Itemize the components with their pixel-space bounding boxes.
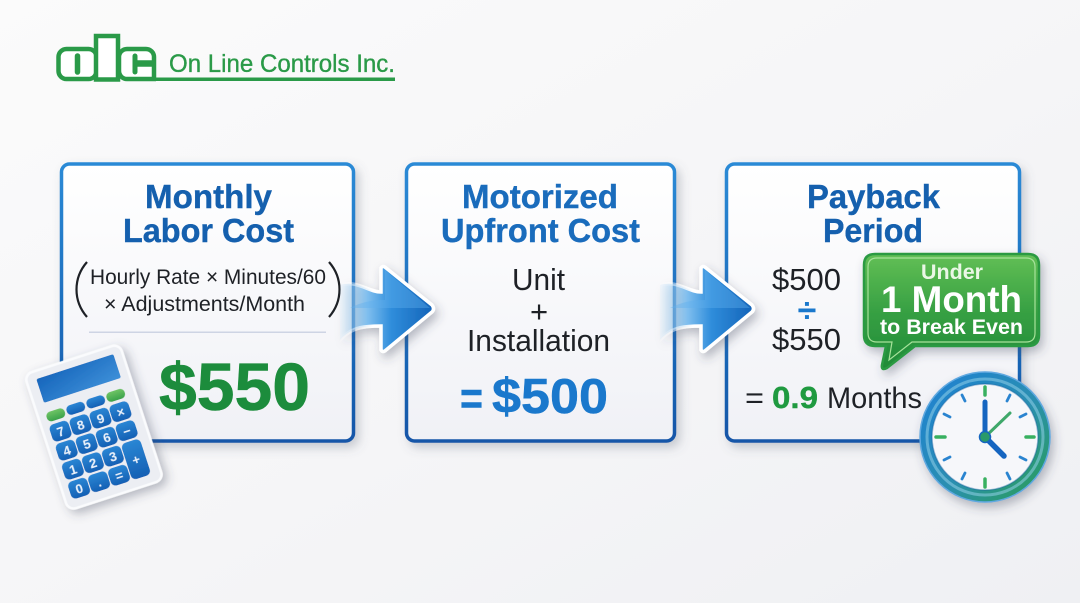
clock ticks <box>936 387 1034 487</box>
heading: motorized upfront cost: Upfront Cost <box>441 212 640 249</box>
formula: 500 divided by 550: $550 <box>772 322 841 357</box>
callout text: Under <box>921 261 983 284</box>
panel: monthly labor cost <box>62 164 354 441</box>
arrow: labor to upfront <box>340 266 434 352</box>
icon: calculator: + <box>130 451 142 468</box>
logo mark: olc letters <box>58 36 156 80</box>
formula: unit plus installation: Unit <box>512 262 565 297</box>
logo underline <box>152 78 395 81</box>
panel: payback period <box>726 164 1020 441</box>
callout: under 1 month to break even <box>864 254 1039 369</box>
formula text: × Adjustments/Month <box>104 293 305 316</box>
formula: unit plus installation <box>467 262 610 358</box>
heading: monthly labor cost <box>123 178 294 249</box>
icon: calculator: 2 <box>87 455 99 471</box>
logo: On Line Controls <box>58 36 395 81</box>
formula: 500 divided by 550: $500 <box>772 262 841 297</box>
icon: calculator: 5 <box>81 436 93 452</box>
icon: calculator: 8 <box>75 417 86 433</box>
heading: payback period <box>807 178 941 249</box>
icon: calculator <box>24 344 164 511</box>
formula: unit plus installation: Installation <box>467 323 610 358</box>
clock hands <box>985 402 1010 456</box>
formula: 500 divided by 550 <box>772 262 841 357</box>
value: $550: $550 <box>159 350 310 425</box>
formula text <box>76 262 340 317</box>
icon: calculator: 9 <box>95 410 106 427</box>
heading: monthly labor cost: Monthly <box>145 178 273 215</box>
formula: 500 divided by 550: ÷ <box>798 292 816 330</box>
formula text: Hourly Rate × Minutes/60 <box>90 266 326 289</box>
icon: calculator: . <box>95 475 103 490</box>
icon: calculator: 0 <box>73 480 85 497</box>
result: 0.9 months <box>745 380 922 415</box>
heading: motorized upfront cost <box>441 178 640 249</box>
icon: calculator: 3 <box>107 448 119 465</box>
value: $500: = <box>460 372 483 424</box>
callout text: to Break Even <box>880 315 1023 339</box>
icon: calculator: 4 <box>61 442 73 459</box>
logo company name: On Line Controls Inc. <box>169 50 395 78</box>
heading: payback period: Period <box>823 212 923 249</box>
value: $500: $500 <box>492 370 608 424</box>
icon: clock <box>920 372 1050 502</box>
panel: motorized upfront cost <box>406 164 674 441</box>
callout text <box>880 261 1023 339</box>
icon: calculator: = <box>113 467 126 484</box>
icon: calculator: 1 <box>67 461 79 478</box>
arrow: upfront to payback <box>660 266 754 352</box>
callout text: 1 Month <box>881 279 1022 320</box>
heading: payback period: Payback <box>807 178 941 215</box>
result: 0.9 months: = <box>745 382 764 415</box>
icon: calculator: − <box>121 423 133 439</box>
icon: calculator: × <box>115 404 127 420</box>
heading: monthly labor cost: Labor Cost <box>123 212 294 249</box>
formula: unit plus installation: + <box>530 294 548 329</box>
heading: motorized upfront cost: Motorized <box>462 178 618 215</box>
icon: calculator: 6 <box>101 429 113 446</box>
result: 0.9 months: 0.9 <box>772 380 818 415</box>
icon: calculator: 7 <box>55 423 66 440</box>
result: 0.9 months: Months <box>827 382 922 415</box>
